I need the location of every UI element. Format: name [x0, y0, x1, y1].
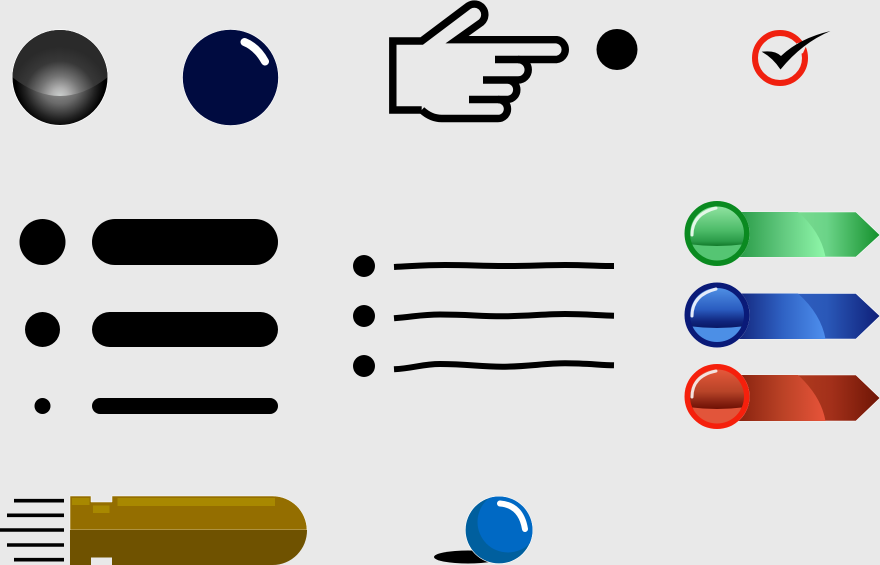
- list: graded dots and pills: [20, 219, 278, 414]
- small dot: [34, 398, 50, 414]
- icon: navy glossy sphere: [182, 30, 278, 126]
- icon: blue ball with shadow: [434, 496, 533, 564]
- button: red ribbon: [684, 364, 880, 429]
- button: green ribbon: [684, 201, 880, 266]
- icon: gray glossy sphere: [12, 29, 108, 126]
- orb: [684, 201, 750, 266]
- ball: [465, 496, 533, 564]
- icon: speed lines: [0, 501, 64, 560]
- ribbon: [730, 212, 880, 257]
- icon: pointing hand: [393, 4, 565, 118]
- wavy line 3: [394, 363, 614, 369]
- wavy line 1: [394, 265, 614, 267]
- icon: red ring with check mark: [755, 31, 830, 83]
- dot 3: [353, 355, 375, 377]
- dot 1: [353, 255, 375, 277]
- small pill: [92, 398, 278, 414]
- orb: [684, 282, 750, 348]
- ribbon: [730, 375, 880, 421]
- orb: [684, 364, 750, 429]
- icon: brass bullet: [70, 496, 307, 565]
- large pill: [92, 219, 278, 265]
- dot 2: [353, 305, 375, 327]
- lower half: [70, 530, 307, 565]
- bullet dot: top: [596, 29, 638, 70]
- highlight: [500, 504, 525, 529]
- ribbon: [730, 294, 880, 339]
- highlights: [72, 498, 90, 505]
- medium pill: [92, 312, 278, 347]
- wavy line 2: [394, 314, 614, 318]
- medium dot: [25, 312, 60, 347]
- shadow: [434, 550, 502, 564]
- list: dots with wavy lines: [353, 255, 614, 377]
- upper half: [70, 496, 307, 530]
- large dot: [20, 219, 66, 265]
- button: blue ribbon: [684, 282, 880, 348]
